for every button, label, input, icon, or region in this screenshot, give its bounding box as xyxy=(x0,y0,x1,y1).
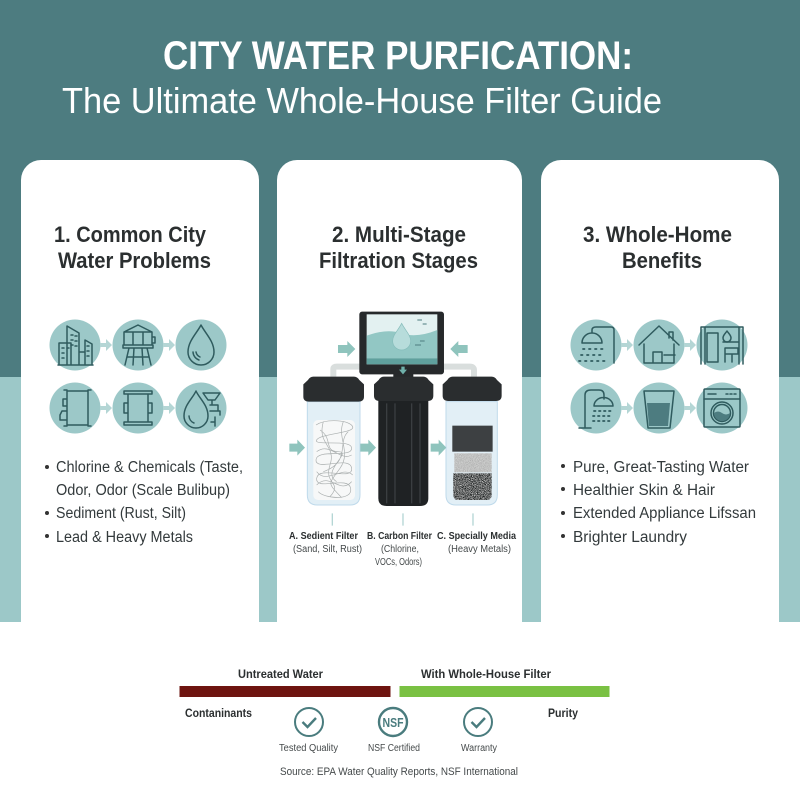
icon: washing machine xyxy=(696,382,748,434)
heading: problems: 1. Common City xyxy=(54,222,207,247)
icon: house xyxy=(634,320,684,370)
source note: Source: EPA Water Quality Reports, NSF International xyxy=(280,766,518,778)
heading: benefits: 3. Whole-Home xyxy=(583,222,732,247)
icon: shower head xyxy=(570,320,622,370)
icon: city buildings xyxy=(50,320,100,370)
bullet list: problems: Odor, Odor (Scale Bulibup) xyxy=(56,482,230,499)
arrow xyxy=(163,339,175,351)
icon: water tower xyxy=(112,320,164,370)
arrow xyxy=(163,402,175,414)
arrow xyxy=(684,402,696,414)
tank display xyxy=(359,312,444,378)
icon: water drop xyxy=(176,320,226,370)
bullet list: benefits: Healthier Skin & Hair xyxy=(573,482,715,499)
comparison bar: with whole-house filter: Purity xyxy=(548,708,579,720)
comparison bar: untreated water: Contaninants xyxy=(185,708,252,720)
heading: benefits: Benefits xyxy=(622,248,702,273)
heading: problems xyxy=(54,222,211,273)
arrow: right into tank xyxy=(338,341,355,357)
label B: B. Carbon Filter xyxy=(367,531,432,542)
label B: (Chlorine, xyxy=(381,544,419,555)
icon: bathroom interior xyxy=(696,320,748,370)
icon: pipe fitting housing xyxy=(50,382,100,434)
icon: glass of water xyxy=(634,382,684,434)
icon: drop with faucet xyxy=(176,382,226,434)
label A xyxy=(289,531,362,555)
pipes xyxy=(333,367,474,377)
heading: problems: Water Problems xyxy=(58,248,211,273)
label B xyxy=(367,531,432,568)
filter A: sediment xyxy=(303,377,364,505)
bullet list: benefits: Extended Appliance Lifssan xyxy=(573,505,756,522)
background: dark teal upper band xyxy=(0,0,800,377)
bullet list: problems: Sediment (Rust, Silt) xyxy=(56,505,186,522)
illustration: filter system xyxy=(289,312,502,526)
panel: common city water problems xyxy=(21,160,259,622)
filter B: carbon xyxy=(374,377,433,506)
comparison bar: with whole-house filter: With Whole-House Filter xyxy=(421,669,552,681)
label C: C. Specially Media xyxy=(437,531,516,542)
arrow xyxy=(621,339,633,351)
icon: wall shower xyxy=(570,382,622,434)
badge: tested quality xyxy=(279,708,338,754)
comparison bar: untreated water: Untreated Water xyxy=(238,669,323,681)
subtitle: The Ultimate Whole-House Filter Guide xyxy=(62,80,662,121)
bullet list: problems: Lead & Heavy Metals xyxy=(56,529,193,546)
badge: NSF certified: NSF xyxy=(382,715,404,730)
background: light teal lower band xyxy=(0,377,800,622)
comparison bar: with whole-house filter xyxy=(400,669,610,720)
heading: benefits xyxy=(583,222,732,273)
icon: filter cartridge xyxy=(112,382,164,434)
background: white footer xyxy=(0,622,800,800)
title: CITY WATER PURFICATION: xyxy=(163,34,633,78)
filter C: specialty media xyxy=(443,377,502,505)
panel: multi-stage filtration xyxy=(277,160,522,622)
arrow xyxy=(100,339,112,351)
label A: (Sand, Silt, Rust) xyxy=(293,544,362,555)
bullet list: benefits: Pure, Great-Tasting Water xyxy=(573,459,749,476)
arrow xyxy=(684,339,696,351)
badge: NSF certified xyxy=(368,708,420,754)
arrow: left into tank xyxy=(450,341,468,357)
bullet list: benefits xyxy=(561,459,756,546)
comparison bar: untreated water xyxy=(180,669,390,720)
bullet list: problems: Chlorine & Chemicals (Taste, xyxy=(56,459,243,476)
heading: filtration: Filtration Stages xyxy=(319,248,478,273)
bullet list: benefits: Brighter Laundry xyxy=(573,529,687,546)
leader lines xyxy=(332,513,473,526)
heading: filtration: 2. Multi-Stage xyxy=(332,222,466,247)
label A: A. Sedient Filter xyxy=(289,531,358,542)
label C xyxy=(437,531,516,555)
bullet list: problems xyxy=(45,459,243,546)
badge: tested quality: Tested Quality xyxy=(279,743,338,754)
heading: filtration xyxy=(319,222,478,273)
badge: warranty: Warranty xyxy=(461,743,497,754)
panel: whole-home benefits xyxy=(541,160,779,622)
arrow xyxy=(100,402,112,414)
badge: NSF certified: NSF Certified xyxy=(368,743,420,754)
label B: VOCs, Odors) xyxy=(375,557,422,568)
label C: (Heavy Metals) xyxy=(448,544,511,555)
arrow xyxy=(621,402,633,414)
flow arrows xyxy=(289,440,446,456)
badge: warranty xyxy=(461,708,497,754)
